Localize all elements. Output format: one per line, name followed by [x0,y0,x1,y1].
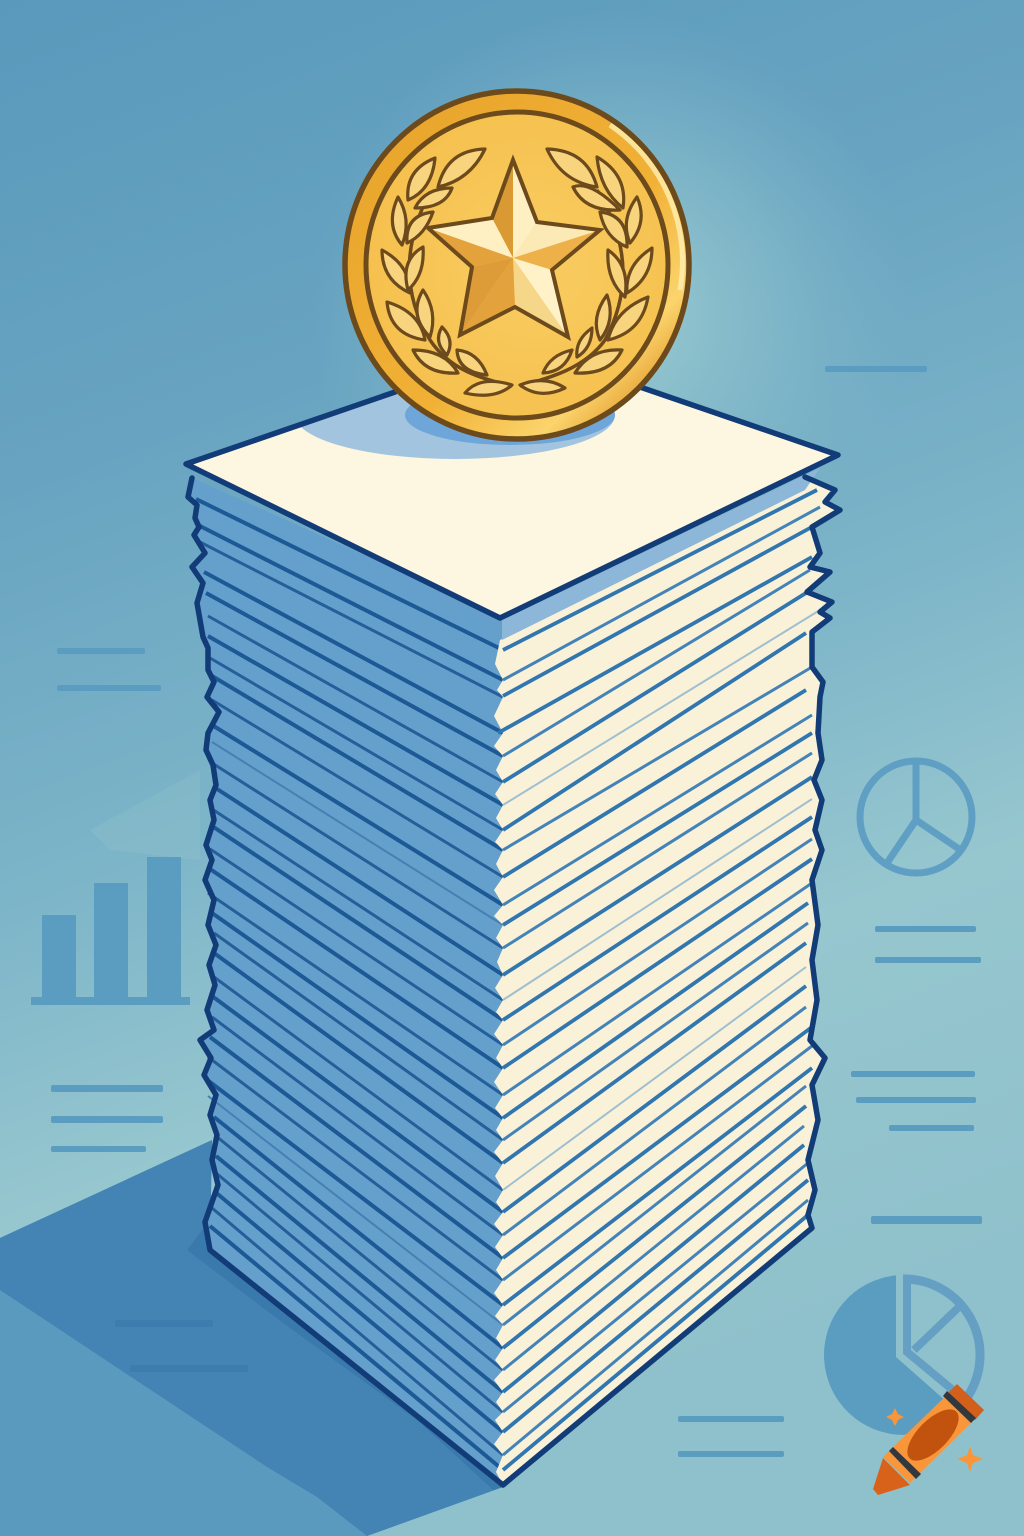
icon: orange crayon with sparkles [873,1384,984,1495]
medal rim [345,91,689,439]
icon: ring pie chart [860,761,972,873]
stack outline [188,477,840,1485]
stack right face [494,468,840,1485]
decorative text lines: right middle [875,926,981,963]
icon: solid pie chart [824,1275,980,1435]
decorative text lines: upper right [825,366,927,372]
stack left face [188,478,510,1485]
paper stack [186,371,840,1485]
decorative text lines: bottom [678,1416,784,1457]
decorative text lines: left middle [57,648,161,691]
cast shadow of stack [0,1140,503,1536]
star [428,160,600,337]
top sheet [186,371,838,618]
decorative text lines: right lower [851,1071,982,1224]
gold medal [345,91,689,439]
icon: bar chart [31,857,190,1005]
laurel wreath left [382,149,512,395]
decorative text lines: lower left [51,1085,163,1152]
decorative text lines: in shadow [115,1320,248,1372]
laurel wreath right [520,149,652,393]
